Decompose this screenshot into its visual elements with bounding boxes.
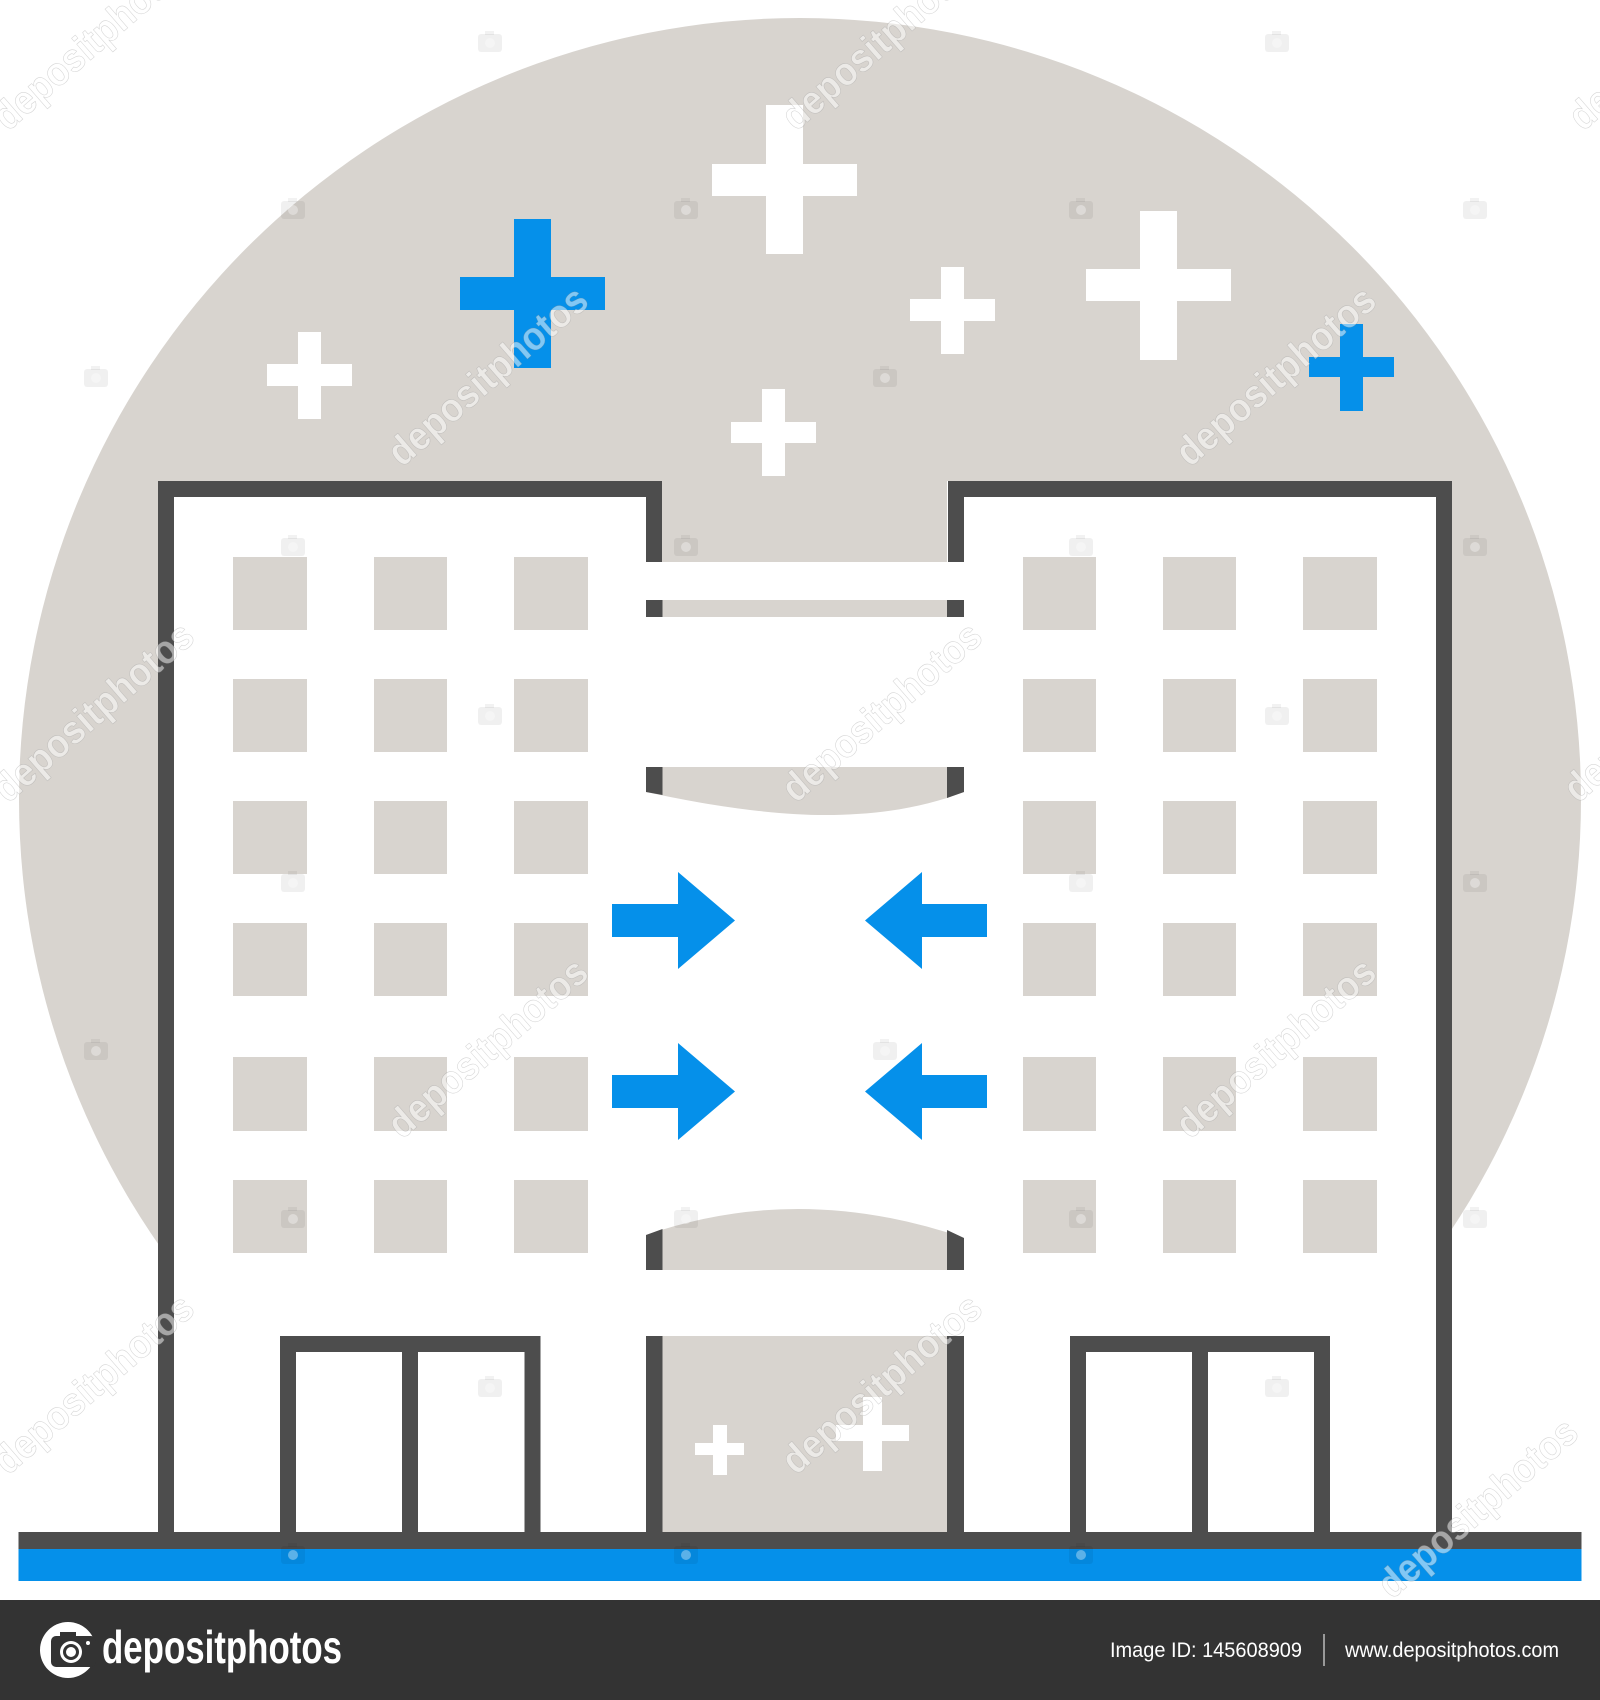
plus: entrance small (695, 1425, 744, 1475)
windows: left wing (233, 557, 588, 1253)
plus: large white top (712, 105, 857, 254)
plus: entrance large (836, 1397, 909, 1471)
plus: small white lower (731, 389, 816, 476)
bulging lower window (646, 1209, 964, 1270)
divider (1323, 1634, 1325, 1666)
watermark: depositphotos (1167, 950, 1385, 1147)
icon: camera logo (40, 1622, 96, 1678)
plus signs in the sky (267, 105, 1394, 476)
plus: small white center (910, 267, 995, 354)
arrow: upper left pointing right (612, 872, 735, 969)
upper thin window strip (646, 600, 964, 617)
watermark: depositphotos (379, 278, 597, 475)
central entrance (646, 1336, 964, 1532)
image id: Image ID: 145608909 (1110, 1639, 1302, 1662)
ground line (18, 1532, 1582, 1581)
right entrance doors (1078, 1344, 1322, 1532)
arrow: lower left pointing right (612, 1043, 735, 1140)
hospital building (158, 481, 1452, 1532)
arrow: upper right pointing left (865, 872, 987, 969)
plus: small blue right (1309, 324, 1394, 411)
bulging upper window (646, 767, 964, 815)
logo wordmark: depositphotos (102, 1621, 342, 1673)
watermark: depositphotos (379, 950, 597, 1147)
watermark: depositphotos (1167, 278, 1385, 475)
building outline (166, 489, 1444, 1532)
watermark: depositphotos (1369, 1410, 1587, 1607)
left entrance doors (288, 1344, 532, 1532)
website url: www.depositphotos.com (1344, 1639, 1559, 1662)
plus: large blue (460, 219, 605, 368)
plus: large white right (1086, 211, 1231, 360)
building white body (158, 481, 1452, 1532)
watermark: depositphotos (773, 1286, 991, 1483)
footer bar (0, 1600, 1600, 1700)
plus: small white left (267, 332, 352, 419)
arrow: lower right pointing left (865, 1043, 987, 1140)
compression arrows (612, 872, 987, 1140)
windows: right wing (1023, 557, 1377, 1253)
watermark: depositphotos (773, 614, 991, 811)
